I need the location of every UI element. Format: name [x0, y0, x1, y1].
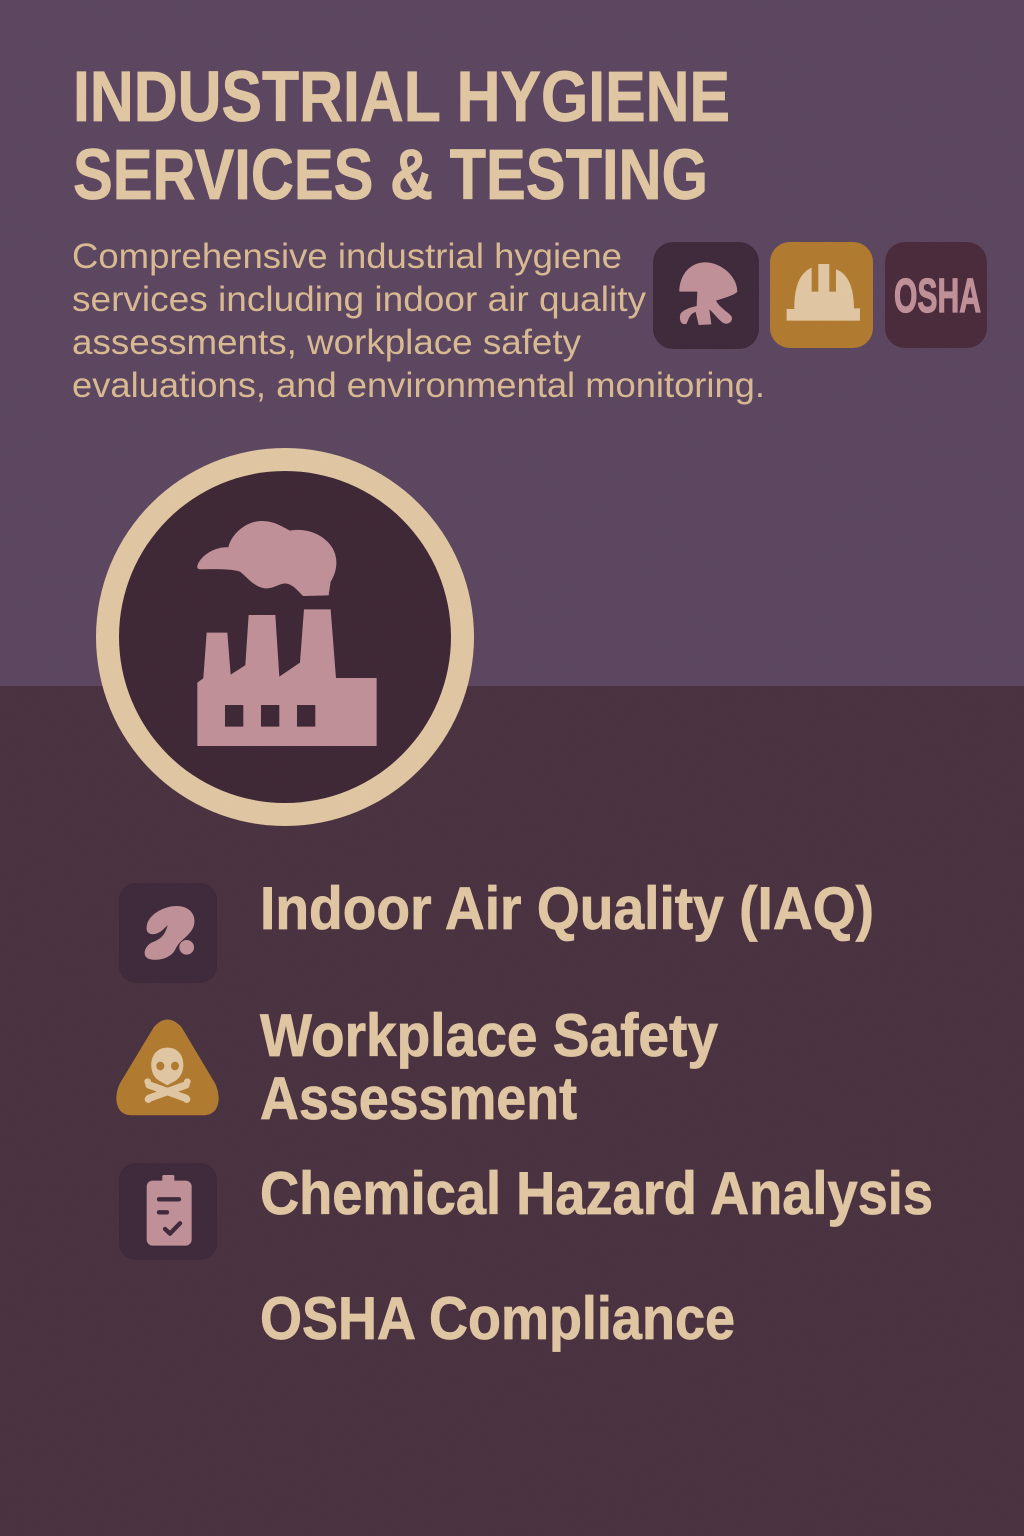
list item: workplace safety assessment: Workplace Safety: [260, 1002, 719, 1069]
title: [73, 58, 730, 215]
title: SERVICES & TESTING: [73, 136, 708, 215]
list item: OSHA compliance: OSHA Compliance: [260, 1285, 735, 1352]
list item: chemical hazard analysis: Chemical Hazard Analysis: [260, 1160, 933, 1227]
panel: lower background: [0, 686, 1024, 1536]
icon: air plume badge: [653, 242, 759, 349]
panel: upper background: [0, 0, 1024, 686]
icon: OSHA badge: [885, 242, 987, 348]
intro text block: Comprehensive industrial hygiene: [72, 237, 622, 276]
list item: indoor air quality: Indoor Air Quality (IAQ): [260, 875, 874, 942]
icon: indoor air quality: [119, 883, 217, 983]
icon: factory emblem: [96, 448, 474, 826]
list item: workplace safety assessment: Assessment: [260, 1065, 577, 1132]
title: INDUSTRIAL HYGIENE: [73, 58, 730, 137]
intro text block: [72, 237, 765, 405]
intro text block: assessments, workplace safety: [72, 323, 582, 362]
list item: workplace safety assessment: [260, 1002, 719, 1132]
intro text block: evaluations, and environmental monitoring.: [72, 366, 765, 405]
icon: hard hat badge: [770, 242, 873, 348]
icon: skull warning triangle: [116, 1019, 219, 1115]
intro text block: services including indoor air quality: [72, 280, 647, 319]
icon: clipboard checklist: [119, 1163, 217, 1260]
